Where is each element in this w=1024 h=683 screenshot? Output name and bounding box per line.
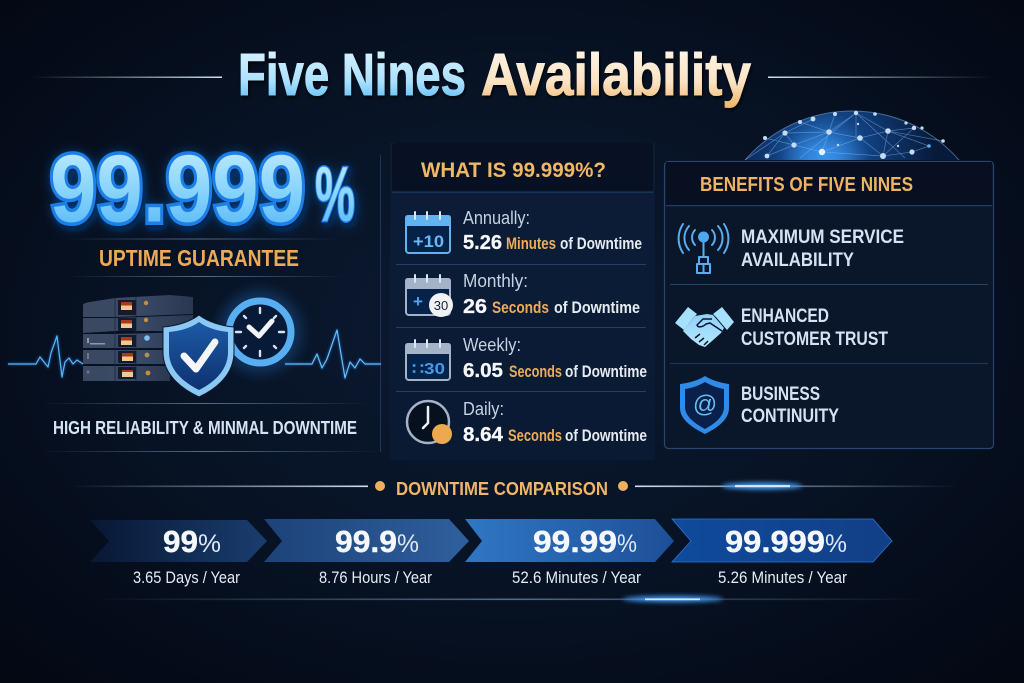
globe illustration — [744, 110, 960, 160]
row: monthly: + — [413, 292, 423, 311]
benefit: maximum service availability — [679, 224, 904, 273]
chevron: 99.999% — [672, 519, 892, 587]
row: weekly: of Downtime — [565, 362, 647, 381]
icon: server rack — [83, 295, 193, 381]
row: weekly: 6.05 — [463, 360, 503, 382]
title: Availability — [481, 42, 751, 108]
heartbeat line left — [8, 336, 83, 377]
row: weekly: Weekly: — [463, 335, 521, 355]
heading: BENEFITS OF FIVE NINES — [700, 174, 913, 196]
glowing footer line — [90, 596, 930, 602]
benefit: maximum service availability: AVAILABILITY — [741, 250, 854, 271]
row: daily: Seconds — [508, 426, 562, 445]
row: daily: 8.64 — [463, 424, 504, 446]
row: annually: Minutes — [506, 234, 556, 253]
row: annually: of Downtime — [560, 234, 642, 253]
row: annually: +10 — [413, 232, 444, 251]
icon: shield with check — [163, 315, 234, 397]
chevron: 99.99%: 99.99 — [533, 524, 617, 559]
heartbeat line right — [285, 330, 381, 378]
panel: benefits of five nines — [664, 162, 994, 448]
row: annually — [405, 208, 642, 254]
row: annually: Annually: — [463, 208, 530, 228]
panel: what is 99.999% — [390, 143, 655, 460]
title: Five Nines — [238, 42, 466, 108]
row: daily: Daily: — [463, 399, 504, 419]
benefit: enhanced customer trust: ENHANCED — [741, 306, 829, 327]
benefit: enhanced customer trust — [675, 306, 888, 350]
panel: uptime guarantee — [8, 136, 381, 452]
chevron: 99.9% — [264, 519, 469, 587]
heading: WHAT IS 99.999%? — [421, 159, 606, 182]
section heading: downtime comparison: DOWNTIME COMPARISON — [396, 478, 608, 499]
row: annually: 5.26 — [463, 232, 502, 254]
benefit: business continuity — [680, 376, 839, 434]
row: weekly — [405, 335, 647, 382]
benefit: business continuity: @ — [693, 391, 717, 418]
chevron: 99% — [90, 520, 267, 587]
row: monthly: 30 — [434, 298, 448, 313]
row: daily: of Downtime — [565, 426, 647, 445]
chevron: 99.99%: 52.6 Minutes / Year — [512, 568, 641, 587]
chevron: 99.99%: % — [617, 530, 637, 558]
row: monthly: Seconds — [492, 298, 549, 317]
benefit: business continuity: CONTINUITY — [741, 406, 839, 427]
chevron: 99%: 99 — [163, 524, 198, 559]
title — [30, 42, 992, 108]
row: weekly: Seconds — [509, 362, 562, 381]
chevron: 99%: 3.65 Days / Year — [133, 568, 240, 587]
benefit: enhanced customer trust: CUSTOMER TRUST — [741, 329, 888, 350]
row: monthly — [405, 271, 640, 318]
caption high reliability: HIGH RELIABILITY & MINMAL DOWNTIME — [53, 418, 357, 438]
chevron: 99.999%: % — [825, 530, 847, 558]
benefit: business continuity: BUSINESS — [741, 384, 820, 405]
section heading: downtime comparison — [70, 478, 960, 499]
chevron: 99.999%: 5.26 Minutes / Year — [718, 568, 847, 587]
benefit: maximum service availability: MAXIMUM SERVICE — [741, 227, 904, 248]
row: daily — [407, 399, 647, 446]
subheading uptime guarantee: UPTIME GUARANTEE — [99, 245, 299, 271]
chevron: 99%: % — [198, 530, 221, 558]
row: monthly: of Downtime — [554, 298, 640, 317]
icon: clock — [218, 290, 302, 374]
row: monthly: Monthly: — [463, 271, 528, 291]
big number 99.999%: % — [315, 150, 355, 238]
row: weekly: ∷30 — [412, 361, 445, 378]
chevron: 99.9%: 99.9 — [335, 524, 397, 559]
chevron: 99.99% — [465, 519, 674, 587]
chevron: 99.9%: % — [397, 530, 419, 558]
chevron: 99.9%: 8.76 Hours / Year — [319, 568, 432, 587]
big number 99.999%: 99.999 — [50, 136, 305, 242]
chevron: 99.999%: 99.999 — [725, 524, 825, 559]
row: monthly: 26 — [463, 296, 487, 318]
